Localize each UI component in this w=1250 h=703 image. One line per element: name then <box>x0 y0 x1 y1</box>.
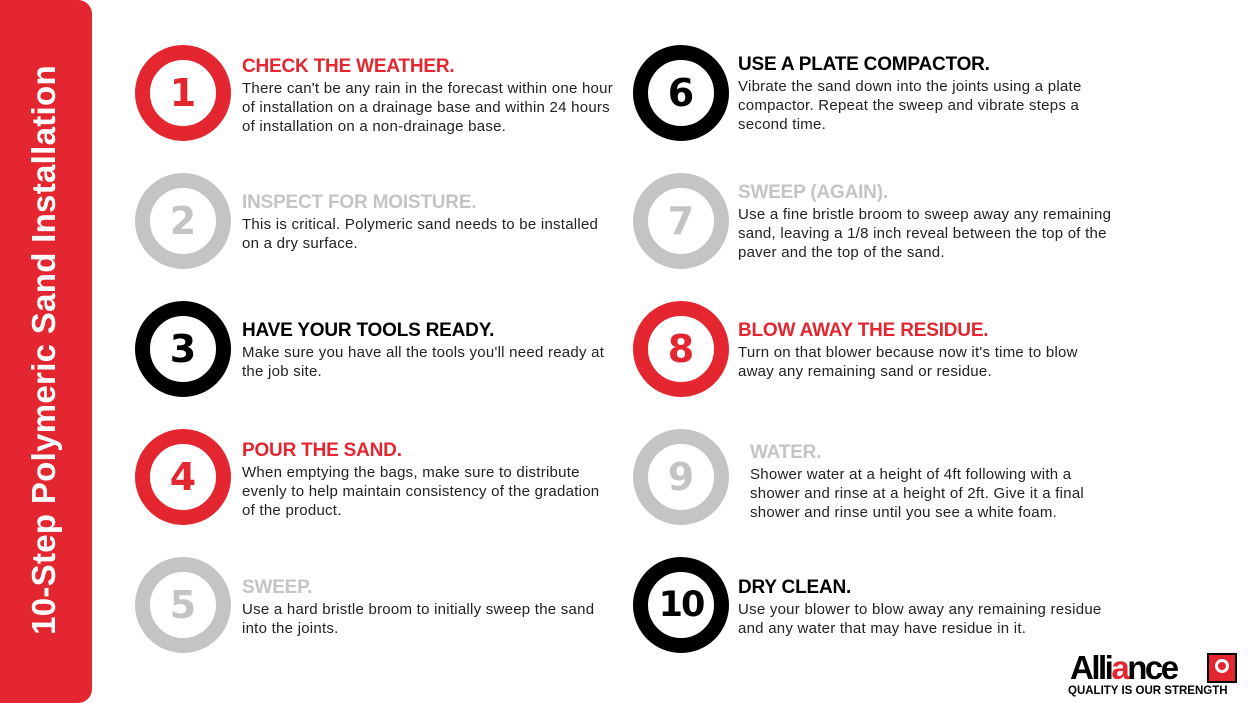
step 2 icon: 2 <box>170 199 196 243</box>
step 1 icon <box>135 45 231 141</box>
step 8 icon <box>633 301 729 397</box>
step 3 text: Make sure you have all the tools you'll need ready at <box>242 344 604 361</box>
step 9 text <box>750 442 1084 521</box>
step 5 text: Use a hard bristle broom to initially sweep the sand <box>242 601 594 618</box>
step 2 text <box>242 192 598 252</box>
step 2 icon <box>135 173 231 269</box>
step 7 icon: 7 <box>668 199 694 243</box>
step 7 text: SWEEP (AGAIN). <box>738 182 888 203</box>
step 9 icon <box>633 429 729 525</box>
step 5 icon <box>135 557 231 653</box>
step 10 text: and any water that may have residue in it. <box>738 620 1026 637</box>
step 4 text: evenly to help maintain consistency of the gradation <box>242 483 599 500</box>
step 4 text: POUR THE SAND. <box>242 440 402 461</box>
side bar <box>0 0 92 703</box>
step 3 text <box>242 320 604 380</box>
step 6 text: compactor. Repeat the sweep and vibrate steps a <box>738 97 1079 114</box>
step 2 text: INSPECT FOR MOISTURE. <box>242 192 476 213</box>
step 5 icon: 5 <box>170 583 196 627</box>
step 9 icon: 9 <box>668 455 694 499</box>
step 1 text <box>242 56 613 135</box>
step 5 text <box>242 577 594 637</box>
step 1 text: of installation on a non-drainage base. <box>242 118 506 135</box>
step 8 text <box>738 320 1078 380</box>
step 10 text <box>738 577 1102 637</box>
step 8 text: BLOW AWAY THE RESIDUE. <box>738 320 988 341</box>
step 4 text <box>242 440 599 519</box>
step 10 text: DRY CLEAN. <box>738 577 851 598</box>
title: 10-Step Polymeric Sand Installation <box>25 65 62 635</box>
step 2 text: on a dry surface. <box>242 235 358 252</box>
step 6 text: Vibrate the sand down into the joints using a plate <box>738 78 1082 95</box>
step 5 text: into the joints. <box>242 620 339 637</box>
step 8 text: Turn on that blower because now it's time to blow <box>738 344 1078 361</box>
step 8 text: away any remaining sand or residue. <box>738 363 992 380</box>
step 1 text: There can't be any rain in the forecast within one hour <box>242 80 613 97</box>
step 6 text <box>738 54 1082 133</box>
step 1 text: of installation on a drainage base and within 24 hours <box>242 99 610 116</box>
step 7 text: Use a fine bristle broom to sweep away any remaining <box>738 206 1111 223</box>
step 2 text: This is critical. Polymeric sand needs to be installed <box>242 216 598 233</box>
step 4 text: When emptying the bags, make sure to distribute <box>242 464 580 481</box>
step 9 text: shower and rinse until you see a white foam. <box>750 504 1057 521</box>
step 4 text: of the product. <box>242 502 342 519</box>
step 9 text: shower and rinse at a height of 2ft. Give it a final <box>750 485 1084 502</box>
step 3 icon <box>135 301 231 397</box>
step 7 text: sand, leaving a 1/8 inch reveal between the top of the <box>738 225 1107 242</box>
step 7 icon <box>633 173 729 269</box>
step 4 icon: 4 <box>170 455 196 499</box>
step 10 icon: 10 <box>659 585 703 625</box>
step 6 text: USE A PLATE COMPACTOR. <box>738 54 990 75</box>
step 1 text: CHECK THE WEATHER. <box>242 56 454 77</box>
logo: QUALITY IS OUR STRENGTH <box>1068 685 1228 697</box>
logo <box>1068 649 1237 697</box>
step 6 text: second time. <box>738 116 826 133</box>
step 7 text <box>738 182 1111 261</box>
step 8 icon: 8 <box>668 327 694 371</box>
step 5 text: SWEEP. <box>242 577 312 598</box>
logo: Alliance <box>1070 649 1177 686</box>
step 10 icon <box>633 557 729 653</box>
step 9 text: WATER. <box>750 442 821 463</box>
step 6 icon <box>633 45 729 141</box>
step 4 icon <box>135 429 231 525</box>
step 3 text: HAVE YOUR TOOLS READY. <box>242 320 494 341</box>
step 9 text: Shower water at a height of 4ft following with a <box>750 466 1071 483</box>
step 7 text: paver and the top of the sand. <box>738 244 945 261</box>
step 3 text: the job site. <box>242 363 322 380</box>
step 10 text: Use your blower to blow away any remaining residue <box>738 601 1102 618</box>
step 1 icon: 1 <box>170 71 196 115</box>
step 3 icon: 3 <box>170 327 196 371</box>
step 6 icon: 6 <box>668 71 694 115</box>
